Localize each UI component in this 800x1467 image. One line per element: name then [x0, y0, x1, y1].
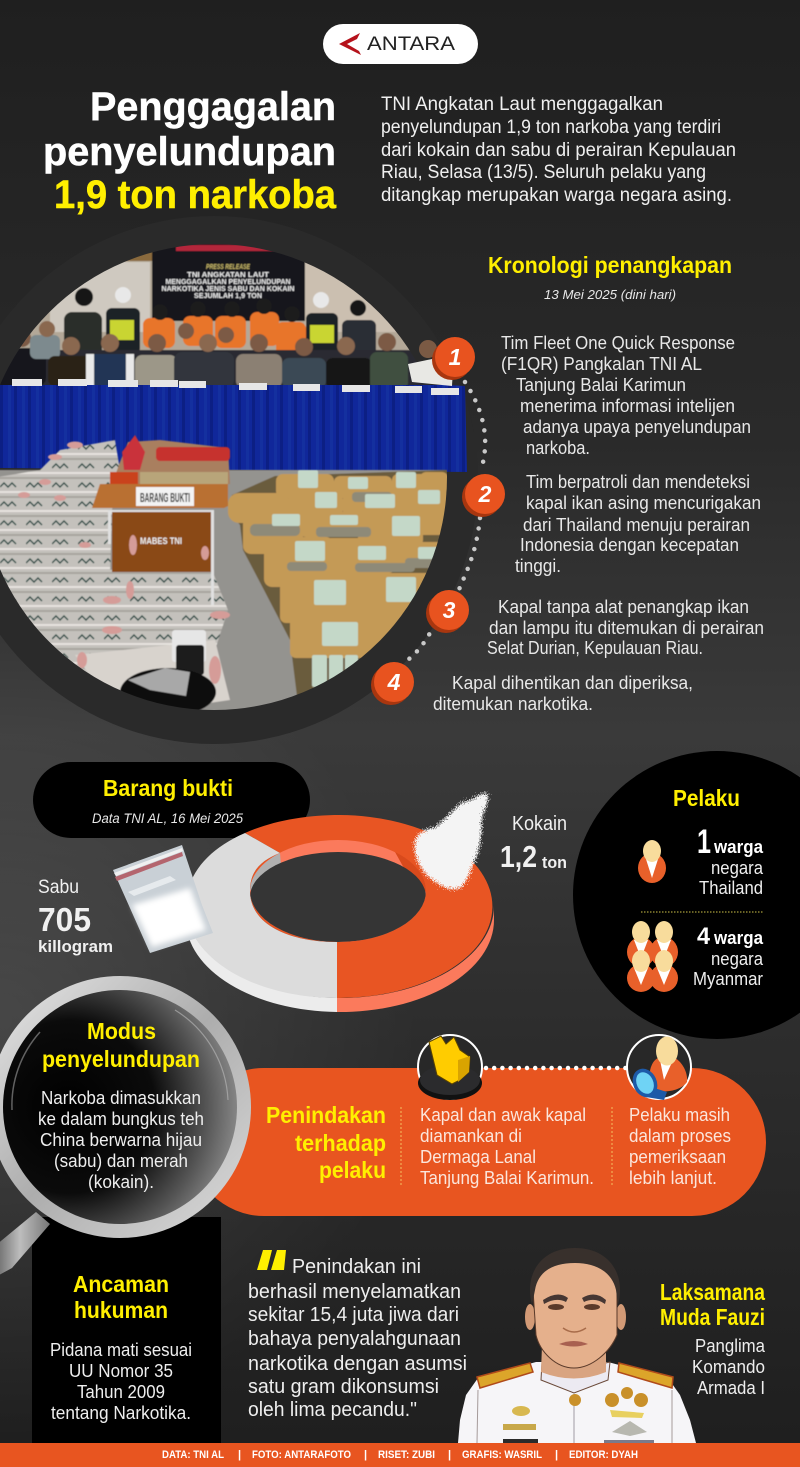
step badge 3 [426, 590, 469, 633]
icon: cocaine powder [415, 793, 488, 889]
heading: kronologi [488, 252, 732, 302]
quote [248, 1250, 467, 1421]
step 4 text [433, 673, 693, 714]
photo banner: NARKOTIKA JENIS SABU DAN KOKAIN [162, 286, 294, 293]
step badge 3: 3 [443, 597, 456, 623]
intro text [381, 94, 736, 206]
quote: satu gram dikonsumsi [248, 1375, 439, 1398]
label: name and position: Laksamana [660, 1279, 765, 1305]
logo: ANTARA [323, 24, 478, 64]
footer credits [0, 1443, 800, 1467]
quote: berhasil menyelamatkan [248, 1280, 461, 1303]
panel: ancaman hukuman: UU Nomor 35 [69, 1361, 173, 1381]
step 4 text: Kapal dihentikan dan diperiksa, [452, 673, 693, 693]
quote: sekitar 15,4 juta jiwa dari [248, 1303, 459, 1326]
title [43, 85, 337, 217]
panel: pelaku: negara [711, 858, 764, 878]
panel: penindakan terhadap pelaku: Pelaku masih [629, 1105, 730, 1125]
step badge 2: 2 [478, 481, 492, 507]
panel: ancaman hukuman: hukuman [74, 1297, 168, 1323]
title: Penggagalan [90, 85, 336, 129]
quote: oleh lima pecandu." [248, 1398, 417, 1421]
label: kokain [500, 813, 567, 874]
footer credits: | [448, 1449, 451, 1461]
icon: person with magnifier [627, 1035, 691, 1100]
panel: penindakan terhadap pelaku: Penindakan [266, 1102, 386, 1128]
panel: modus penyelundupan magnifier [0, 976, 251, 1238]
intro text: Riau, Selasa (13/5). Seluruh pelaku yang [381, 162, 706, 183]
panel: penindakan terhadap pelaku [190, 1068, 766, 1216]
panel: penindakan terhadap pelaku: terhadap [295, 1130, 386, 1156]
panel: penindakan terhadap pelaku: pelaku [319, 1157, 386, 1183]
quote: narkotika dengan asumsi [248, 1352, 467, 1375]
photo standing guards [64, 286, 376, 351]
panel: modus penyelundupan magnifier: penyelundupan [42, 1046, 200, 1072]
icon: sabu bag [113, 845, 213, 953]
label: sabu: Sabu [38, 877, 79, 898]
step 3 text: Kapal tanpa alat penangkap ikan [498, 597, 749, 617]
footer credits: | [238, 1449, 241, 1461]
panel: penindakan terhadap pelaku: pemeriksaan [629, 1147, 726, 1167]
step 2 text [515, 472, 761, 576]
panel: modus penyelundupan magnifier: Modus [87, 1018, 156, 1044]
label: name and position: Armada I [697, 1378, 765, 1398]
photo seated officials [0, 320, 428, 385]
panel: ancaman hukuman: Ancaman [73, 1271, 169, 1297]
panel: barang bukti: Barang bukti [103, 775, 233, 801]
photo: press release with seized evidence [0, 240, 470, 720]
step 2 text: dari Thailand menuju perairan [523, 515, 750, 535]
footer credits: RISET: ZUBI [378, 1449, 435, 1461]
donut chart: sabu vs kokain [186, 815, 494, 1012]
panel: barang bukti [33, 762, 310, 838]
label: kokain: Kokain [512, 813, 567, 835]
step 1 text: menerima informasi intelijen [520, 396, 735, 416]
step 2 text: Tim berpatroli dan mendeteksi [526, 472, 750, 492]
footer credits: EDITOR: DYAH [569, 1449, 638, 1461]
icon: quote mark [257, 1250, 286, 1270]
portrait: Laksamana Muda Fauzi [458, 1248, 696, 1443]
label: name and position [660, 1279, 766, 1398]
step 3 text [487, 597, 764, 658]
logo: ANTARA: ANTARA [367, 34, 455, 55]
step badge 4: 4 [387, 669, 401, 695]
panel: pelaku: Thailand [699, 878, 763, 898]
icon: person thailand [638, 840, 666, 883]
step 1 text: (F1QR) Pangkalan TNI AL [501, 354, 702, 374]
photo banner: TNI ANGKATAN LAUT [187, 272, 270, 279]
footer credits: | [555, 1449, 558, 1461]
magnifier handle [0, 1212, 50, 1280]
heading: kronologi: 13 Mei 2025 (dini hari) [544, 287, 676, 302]
panel: penindakan terhadap pelaku: diamankan di [420, 1126, 522, 1146]
footer credits: FOTO: ANTARAFOTO [252, 1449, 351, 1461]
step 4 text: ditemukan narkotika. [433, 694, 593, 714]
footer credits: DATA: TNI AL [162, 1449, 224, 1461]
panel: pelaku: Pelaku [673, 785, 740, 811]
dotted timeline [402, 382, 485, 664]
step 1 text: adanya upaya penyelundupan [523, 417, 751, 437]
label: sabu: 705 [38, 901, 91, 938]
intro text: TNI Angkatan Laut menggagalkan [381, 94, 663, 115]
panel: modus penyelundupan magnifier: China berwarna hijau [40, 1130, 202, 1150]
icon: shield on pedestal [418, 1035, 482, 1100]
photo wall [20, 260, 410, 351]
photo evidence table: BARANG BUKTI [140, 490, 190, 505]
panel: pelaku: 1 [697, 823, 711, 861]
panel: barang bukti: Data TNI AL, 16 Mei 2025 [92, 811, 243, 826]
step 2 text: kapal ikan asing mencurigakan [526, 493, 761, 513]
quote: Penindakan ini [292, 1255, 421, 1278]
photo camera and head [120, 630, 216, 716]
label: name and position: Panglima [695, 1336, 766, 1356]
panel: penindakan terhadap pelaku: lebih lanjut. [629, 1168, 717, 1188]
step 3 text: dan lampu itu ditemukan di perairan [489, 618, 764, 638]
step badge 1: 1 [449, 344, 461, 370]
intro text: dari kokain dan sabu di perairan Kepulauan [381, 140, 736, 161]
dotted connector [486, 1066, 626, 1070]
quote: bahaya penyalahgunaan [248, 1327, 461, 1350]
panel: pelaku: warga [713, 928, 764, 948]
step 1 text: narkoba. [526, 438, 590, 458]
intro text: ditangkap merupakan warga negara asing. [381, 185, 732, 206]
panel: modus penyelundupan magnifier: Narkoba dimasukkan [41, 1088, 201, 1108]
panel: ancaman hukuman: Pidana mati sesuai [50, 1340, 192, 1360]
intro text: penyelundupan 1,9 ton narkoba yang terdiri [381, 117, 721, 138]
panel: modus penyelundupan magnifier: (kokain). [88, 1172, 154, 1192]
panel: penindakan terhadap pelaku: dalam proses [629, 1126, 731, 1146]
dark circle behind photo [0, 216, 478, 744]
panel: ancaman hukuman: Tahun 2009 [77, 1382, 165, 1402]
label: name and position: Komando [692, 1357, 765, 1377]
panel: modus penyelundupan magnifier: (sabu) dan merah [54, 1151, 188, 1171]
heading: kronologi: Kronologi penangkapan [488, 252, 732, 278]
label: kokain: ton [542, 853, 567, 872]
panel: pelaku: Myanmar [693, 969, 763, 989]
label: kokain: 1,2 [500, 839, 537, 874]
photo banner: MENGGAGALKAN PENYELUNDUPAN [166, 279, 290, 286]
step badge 4 [371, 662, 414, 705]
label: sabu: killogram [38, 937, 113, 956]
photo evidence table: MABES TNI [140, 536, 182, 546]
photo sacks left [0, 440, 230, 716]
photo banner: SEJUMLAH 1,9 TON [194, 293, 262, 300]
photo prisoners in orange [142, 311, 307, 351]
panel: pelaku [573, 751, 800, 1039]
step badge 2 [462, 474, 505, 517]
footer credits: | [364, 1449, 367, 1461]
label: name and position: Muda Fauzi [660, 1304, 765, 1330]
photo banner: PRESS RELEASE [206, 264, 250, 271]
step 1 text [501, 333, 751, 458]
panel: pelaku: warga [713, 837, 764, 857]
step badge 1 [432, 337, 475, 380]
photo floor [0, 470, 460, 715]
panel: modus penyelundupan magnifier: ke dalam bungkus teh [38, 1109, 204, 1129]
step 1 text: Tanjung Balai Karimun [516, 375, 686, 395]
photo banner [152, 243, 305, 321]
label: sabu [38, 877, 113, 956]
icon: people myanmar [627, 921, 678, 992]
step 2 text: Indonesia dengan kecepatan [520, 535, 739, 555]
footer credits: GRAFIS: WASRIL [462, 1449, 542, 1461]
step 2 text: tinggi. [515, 556, 561, 576]
photo golden parcels right [227, 470, 447, 695]
panel: ancaman hukuman: tentang Narkotika. [51, 1403, 191, 1423]
panel: penindakan terhadap pelaku: Kapal dan awak kapal [420, 1105, 586, 1125]
title: 1,9 ton narkoba [54, 173, 337, 217]
photo evidence table [92, 435, 230, 605]
panel: penindakan terhadap pelaku: Tanjung Balai Karimun. [420, 1168, 594, 1188]
title: penyelundupan [43, 130, 336, 174]
step 1 text: Tim Fleet One Quick Response [501, 333, 735, 353]
step 3 text: Selat Durian, Kepulauan Riau. [487, 638, 703, 658]
panel: penindakan terhadap pelaku: Dermaga Lanal [420, 1147, 536, 1167]
panel: pelaku: negara [711, 949, 764, 969]
panel: ancaman hukuman [32, 1217, 221, 1443]
panel: pelaku: 4 [697, 923, 711, 950]
photo blue table (pops out of circle) [0, 340, 467, 472]
